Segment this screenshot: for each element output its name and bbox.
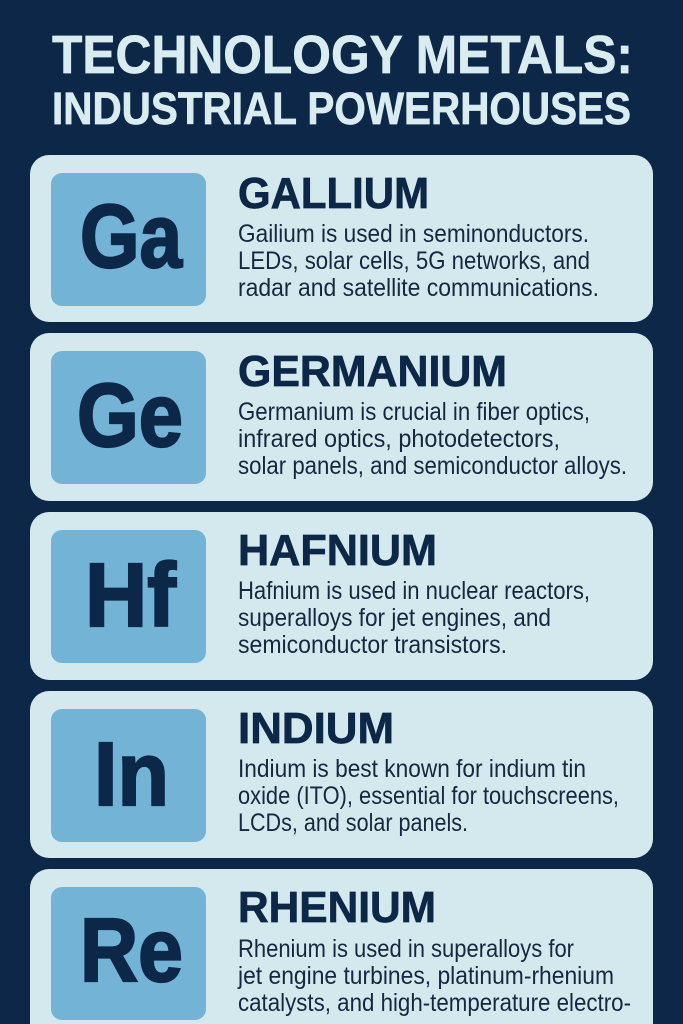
description: gallium: radar and satellite communications. <box>238 274 599 302</box>
symbol tile: Ge <box>51 351 206 484</box>
heading: germanium: GERMANIUM <box>238 347 507 396</box>
panel: germanium <box>30 333 653 501</box>
panel: gallium <box>30 155 653 322</box>
description: hafnium: Hafnium is used in nuclear reactors, <box>238 577 590 605</box>
description: rhenium: catalysts, and high-temperature electro- <box>238 989 631 1017</box>
symbol tile: Ga <box>51 173 206 306</box>
title: TECHNOLOGY METALS: <box>52 25 633 85</box>
symbol tile: Ge: Ge <box>77 366 183 466</box>
title: INDUSTRIAL POWERHOUSES <box>52 83 631 134</box>
symbol tile: Ga: Ga <box>80 187 183 287</box>
symbol tile: Hf: Hf <box>85 546 177 646</box>
description: indium <box>238 755 619 837</box>
description: rhenium: Rhenium is used in superalloys for <box>238 935 574 963</box>
symbol tile: Re: Re <box>80 901 183 1001</box>
description: rhenium: jet engine turbines, platinum-rhenium <box>237 962 614 990</box>
description: hafnium: semiconductor transistors. <box>238 631 507 659</box>
symbol tile: Re <box>51 887 206 1020</box>
heading: gallium: GALLIUM <box>238 169 429 218</box>
description: hafnium <box>238 577 590 659</box>
title <box>52 25 633 134</box>
description: germanium <box>238 398 627 480</box>
panel: hafnium <box>30 512 653 680</box>
description: gallium <box>238 220 599 302</box>
panel: rhenium <box>30 869 653 1024</box>
description: germanium: solar panels, and semiconductor alloys. <box>238 452 627 480</box>
description: germanium: infrared optics, photodetectors, <box>238 425 560 453</box>
panel: indium <box>30 691 653 858</box>
description: gallium: LEDs, solar cells, 5G networks, and <box>238 247 590 275</box>
description: indium: oxide (ITO), essential for touchscreens, <box>238 782 619 810</box>
heading: indium: INDIUM <box>238 704 394 753</box>
description: hafnium: superalloys for jet engines, and <box>238 604 551 632</box>
description: indium: Indium is best known for indium tin <box>238 755 586 783</box>
description: gallium: Gailium is used in seminonductors. <box>238 220 589 248</box>
description: indium: LCDs, and solar panels. <box>238 809 468 837</box>
heading: rhenium: RHENIUM <box>238 883 436 932</box>
heading: hafnium: HAFNIUM <box>238 526 437 575</box>
symbol tile: In <box>51 709 206 842</box>
description: germanium: Germanium is crucial in fiber optics, <box>238 398 590 426</box>
symbol tile: Hf <box>51 530 206 663</box>
description: rhenium <box>237 935 631 1017</box>
symbol tile: In: In <box>94 725 169 825</box>
